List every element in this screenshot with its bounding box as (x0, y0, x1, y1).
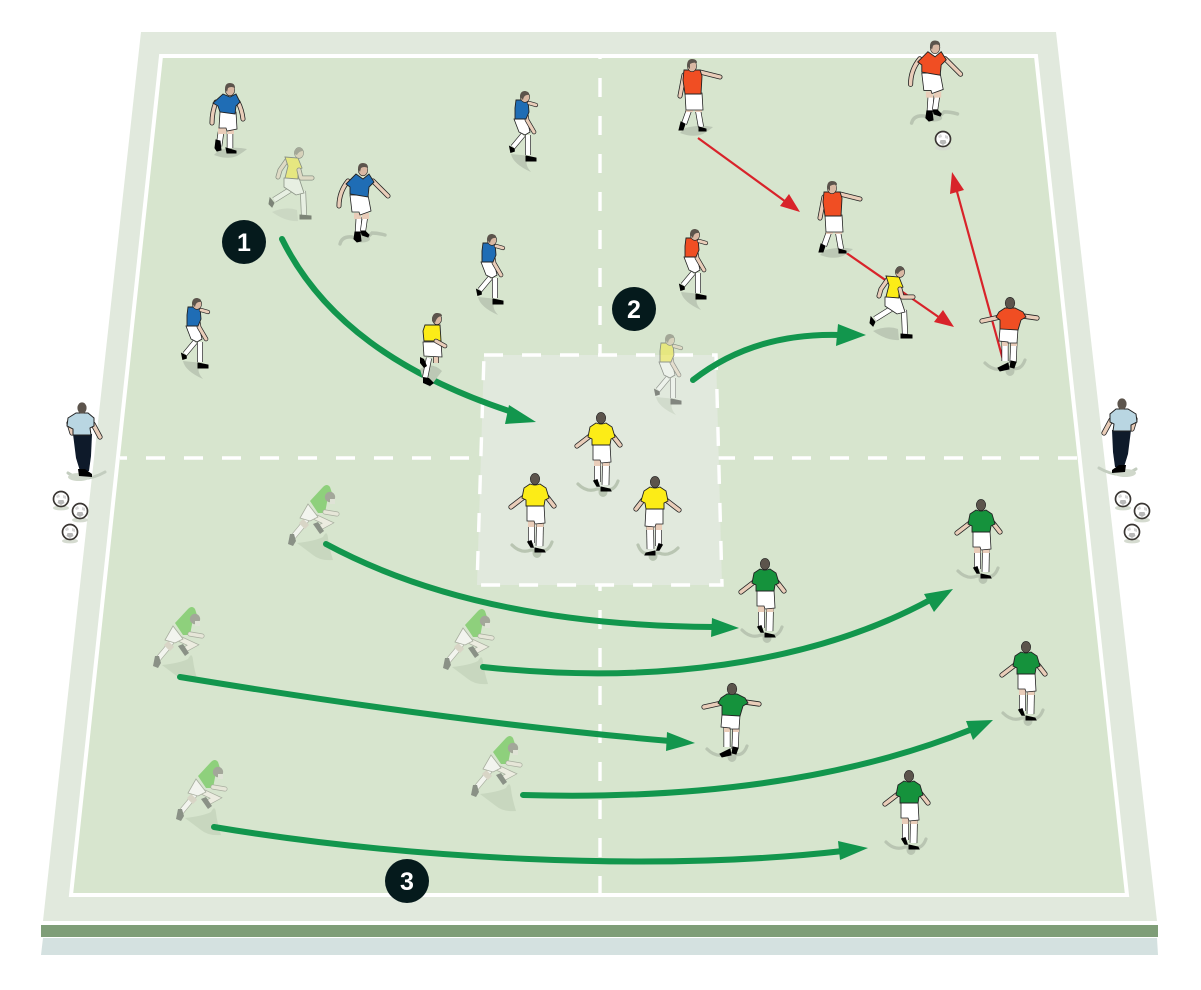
yellow player centre 2 (511, 473, 554, 558)
blue player 1 (212, 83, 247, 158)
ghost player: green 5 (176, 760, 225, 835)
red player 1 (679, 59, 720, 136)
red player 5 back view (982, 297, 1037, 376)
step badge 1 (222, 220, 266, 264)
match ball (935, 132, 951, 150)
halfway and quarter lines (120, 56, 1080, 895)
ghost player: green 4 (471, 736, 520, 811)
red player 3 (819, 181, 860, 258)
balls left (53, 492, 88, 543)
step badge 1: 1 (237, 229, 251, 257)
pitch front edge band (41, 925, 1158, 937)
ghost player: green 3 (443, 609, 492, 684)
step badge 2: 2 (627, 296, 641, 324)
yellow player defending (870, 267, 913, 340)
blue player 4 (477, 234, 503, 315)
ghost player: yellow second (655, 334, 681, 415)
red player 2 (911, 40, 961, 123)
pass arrow 2 (845, 252, 954, 327)
green player 5 (885, 770, 928, 855)
green player 2 (741, 558, 784, 643)
step badge 3 (385, 859, 429, 903)
step badge 2 (612, 287, 656, 331)
movement arrow green 3 (180, 677, 695, 751)
ghost player: green 1 (288, 485, 337, 560)
movement arrow green 1 (326, 544, 739, 637)
blue player 3 (339, 163, 388, 244)
pitch reflection strip (41, 938, 1158, 955)
movement arrow green 5 (214, 827, 868, 861)
ghost player: green 2 (153, 607, 202, 682)
movement arrow green 4 (523, 720, 993, 796)
blue player 2 (510, 91, 536, 172)
central zone dashed border (477, 355, 722, 585)
movement arrow 2 (693, 324, 866, 380)
yellow player centre 1 (577, 412, 620, 497)
step badge 3: 3 (400, 868, 414, 896)
green player 1 (957, 499, 1000, 584)
movement arrow 1 (282, 239, 536, 424)
green player 3 (704, 683, 759, 762)
balls right (1115, 492, 1150, 543)
yellow player with run (420, 313, 445, 387)
red player 4 (680, 229, 706, 310)
pass arrow 1 (698, 138, 800, 212)
yellow player centre 3 (636, 476, 679, 561)
green player 4 (1002, 641, 1045, 726)
referee left (67, 402, 105, 481)
blue player 5 (182, 298, 208, 379)
movement arrow green 2 (483, 589, 953, 673)
referee right (1099, 398, 1137, 477)
pass arrow 3 (950, 172, 1003, 360)
ghost player: yellow start (269, 148, 312, 221)
